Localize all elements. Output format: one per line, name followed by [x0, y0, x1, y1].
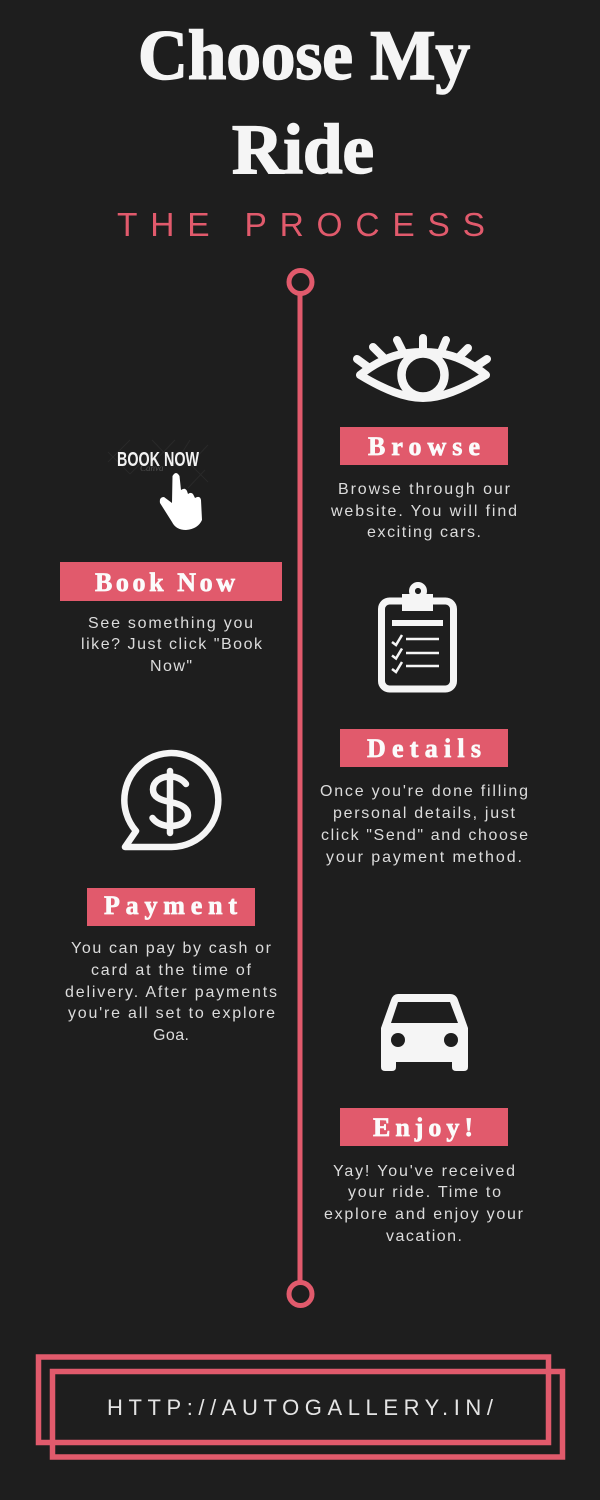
heading: payment	[87, 888, 255, 926]
text: details: click "Send" and choose	[321, 827, 528, 844]
text: details	[320, 783, 528, 866]
text: payment: card at the time of	[91, 962, 252, 979]
text: browse: Browse through our	[338, 481, 511, 498]
heading: payment: Payment	[104, 891, 237, 920]
text: payment: you're all set to explore	[68, 1005, 275, 1022]
icon: eye	[357, 338, 487, 398]
panel: browse	[330, 338, 517, 541]
panel: payment	[65, 753, 277, 1044]
title	[138, 17, 470, 189]
text: book now	[81, 615, 263, 675]
text: details: Once you're done filling	[320, 783, 528, 800]
footer: website link box: HTTP://AUTOGALLERY.IN/	[107, 1395, 494, 1420]
text: payment: Goa.	[153, 1027, 189, 1044]
text: enjoy: Yay! You've received	[333, 1163, 515, 1180]
subtitle: THE PROCESS	[117, 207, 485, 244]
icon: book now button with hand cursor: Canva	[140, 463, 164, 473]
heading: details: Details	[367, 734, 481, 763]
text: payment: You can pay by cash or	[71, 940, 272, 957]
text: browse: exciting cars.	[367, 524, 481, 541]
text: enjoy	[324, 1163, 524, 1245]
icon: car	[381, 994, 468, 1071]
text: enjoy: vacation.	[386, 1228, 462, 1245]
panel: book now	[60, 440, 282, 675]
title: Choose My	[138, 17, 470, 95]
text: browse	[330, 481, 517, 541]
text: payment	[65, 940, 277, 1044]
heading: browse	[340, 427, 508, 465]
text: details: personal details, just	[333, 805, 516, 822]
heading: browse: Browse	[368, 432, 480, 461]
panel: enjoy	[324, 994, 524, 1245]
title: Ride	[232, 111, 374, 189]
text: book now: like? Just click "Book	[81, 636, 263, 653]
icon: book now button with hand cursor	[108, 440, 208, 530]
heading: enjoy	[340, 1108, 508, 1146]
heading: enjoy: Enjoy!	[373, 1113, 473, 1142]
footer: website link box	[38, 1357, 562, 1457]
icon: book now button with hand cursor: BOOK NOW	[117, 449, 199, 471]
text: browse: website. You will find	[330, 503, 517, 520]
heading: book now	[60, 562, 282, 601]
icon: dollar speech bubble	[124, 753, 218, 847]
text: details: your payment method.	[326, 849, 522, 866]
heading: details	[340, 729, 508, 767]
heading: book now: Book Now	[95, 568, 235, 597]
text: book now: See something you	[88, 615, 253, 632]
text: book now: Now"	[150, 658, 192, 675]
text: enjoy: your ride. Time to	[348, 1184, 501, 1201]
timeline	[289, 270, 312, 1306]
text: payment: delivery. After payments	[65, 984, 277, 1001]
icon: clipboard	[382, 585, 454, 689]
text: enjoy: explore and enjoy your	[324, 1206, 524, 1223]
panel: details	[320, 585, 528, 866]
